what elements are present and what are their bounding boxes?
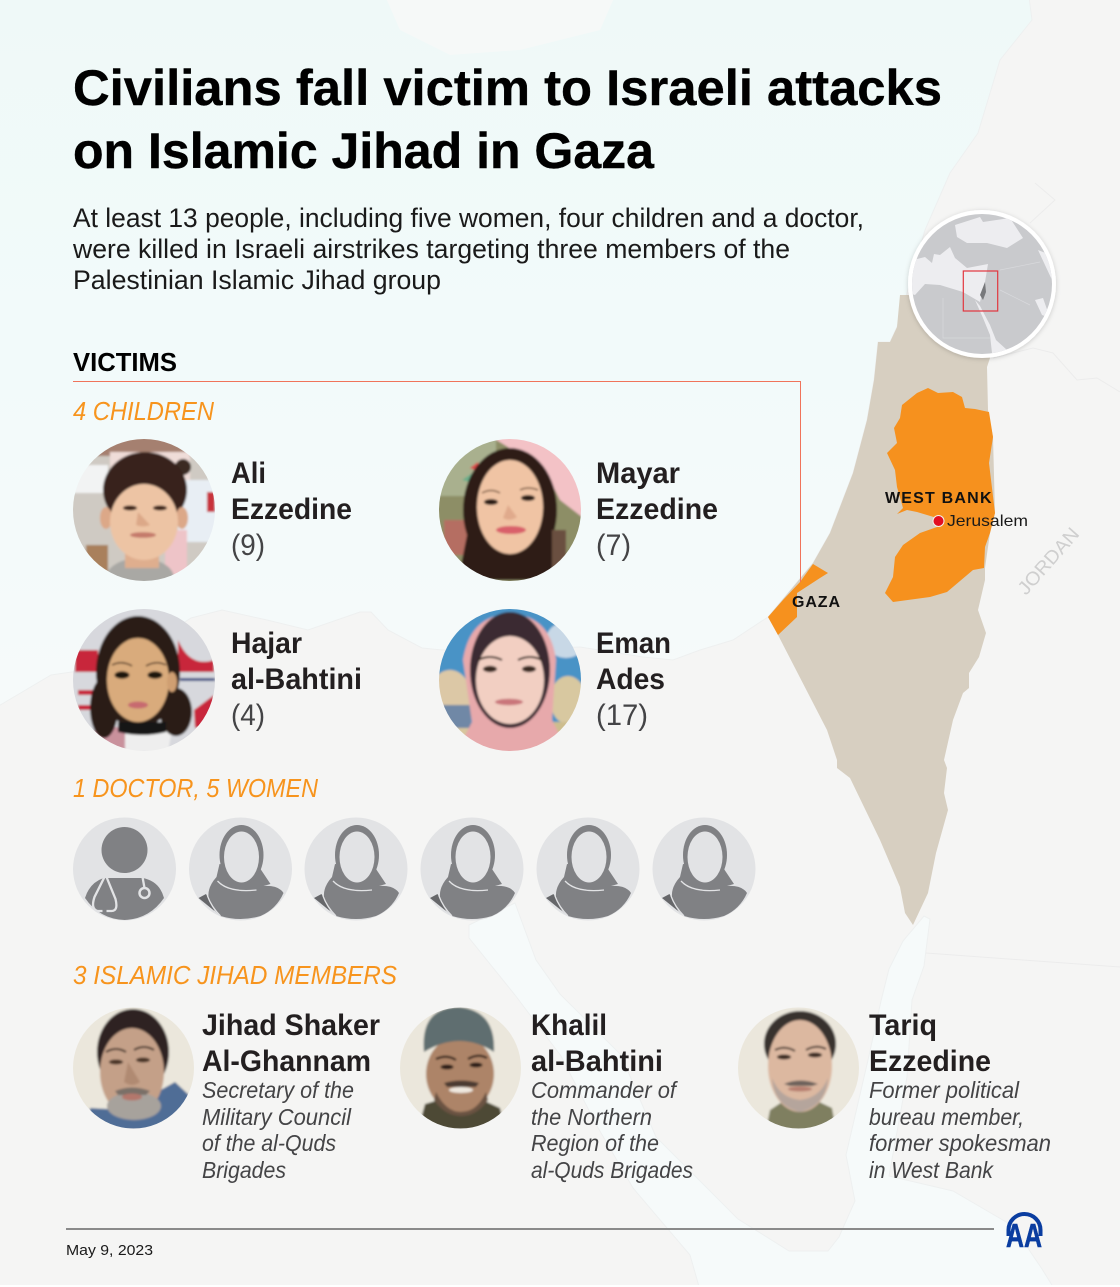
- frame line: [73, 382, 800, 582]
- role: Commander of: [531, 1077, 678, 1103]
- role: Military Council: [202, 1104, 352, 1130]
- icon: woman 4: [536, 818, 640, 920]
- west bank region: [885, 388, 995, 602]
- label: west bank: WEST BANK: [885, 490, 993, 507]
- mediterranean sea: [0, 0, 1032, 707]
- icon: woman 2: [304, 818, 408, 920]
- age: (7): [596, 529, 631, 562]
- label: gaza: GAZA: [792, 594, 842, 611]
- label: jordan: JORDAN: [1014, 524, 1084, 599]
- role: in West Bank: [869, 1157, 994, 1183]
- icon: woman 1: [189, 818, 292, 920]
- age: (9): [231, 529, 265, 562]
- subtitle: [72, 203, 864, 295]
- name: Ezzedine: [869, 1045, 991, 1078]
- portrait: Mayar: [439, 439, 581, 581]
- victim card: Mayar Ezzedine: [436, 436, 718, 586]
- heading: 1 doctor, 5 women: 1 DOCTOR, 5 WOMEN: [73, 773, 318, 803]
- footer rule: [66, 1228, 994, 1230]
- icon: woman 5: [652, 818, 756, 920]
- name: [231, 627, 362, 696]
- heading: victims: VICTIMS: [73, 347, 177, 377]
- name: al-Bahtini: [531, 1045, 663, 1078]
- name: Tariq: [869, 1009, 937, 1042]
- member card: Tariq Ezzedine: [735, 1005, 1051, 1183]
- victim card: Eman Ades: [439, 609, 670, 751]
- name: [869, 1009, 991, 1078]
- member card: Khalil al-Bahtini: [397, 1005, 693, 1183]
- title: [73, 60, 942, 179]
- name: Jihad Shaker: [202, 1009, 381, 1042]
- role: [531, 1077, 693, 1183]
- name: Hajar: [231, 627, 302, 660]
- name: al-Bahtini: [231, 663, 362, 696]
- role: [869, 1077, 1051, 1183]
- subtitle: At least 13 people, including five women, four children and a doctor,: [73, 203, 864, 233]
- role: al-Quds Brigades: [531, 1157, 693, 1183]
- name: Khalil: [531, 1009, 607, 1042]
- role: the Northern: [531, 1104, 652, 1130]
- subtitle: were killed in Israeli airstrikes targeting three members of the: [72, 234, 790, 264]
- age: (17): [596, 699, 648, 732]
- role: of the al-Quds: [202, 1130, 336, 1156]
- name: Ezzedine: [231, 493, 352, 526]
- member card: Jihad Shaker Al-Ghannam: [70, 1005, 381, 1183]
- portrait: Khalil: [400, 1008, 521, 1128]
- name: [202, 1009, 381, 1078]
- name: Ezzedine: [596, 493, 718, 526]
- date: May 9, 2023: [66, 1242, 153, 1259]
- role: former spokesman: [869, 1130, 1051, 1156]
- heading: 3 islamic jihad members: 3 ISLAMIC JIHAD MEMBERS: [73, 960, 398, 990]
- name: Mayar: [596, 457, 681, 490]
- role: Region of the: [531, 1130, 659, 1156]
- name: Ali: [231, 457, 266, 490]
- icon: doctor: [73, 818, 176, 920]
- victim card: Hajar al-Bahtini: [70, 606, 362, 756]
- icon: Anadolu Agency logo: AA: [1006, 1217, 1042, 1254]
- heading: 4 children: 4 CHILDREN: [73, 396, 214, 426]
- locator globe: [905, 210, 1058, 362]
- name: [596, 627, 671, 696]
- name: [596, 457, 718, 526]
- red sea and gulfs: [469, 903, 1055, 1287]
- icon: woman 3: [420, 818, 524, 920]
- name: Al-Ghannam: [202, 1045, 371, 1078]
- role: [202, 1077, 354, 1183]
- jerusalem marker: Jerusalem: [947, 513, 1028, 530]
- gaza region: [768, 564, 828, 635]
- israel landmass: [768, 295, 995, 925]
- portrait: Jihad: [73, 1008, 194, 1128]
- cyprus: [386, 0, 614, 55]
- role: bureau member,: [869, 1104, 1024, 1130]
- portrait: Tariq: [738, 1008, 859, 1128]
- title: Civilians fall victim to Israeli attacks: [73, 60, 942, 116]
- subtitle: Palestinian Islamic Jihad group: [73, 265, 441, 295]
- role: Secretary of the: [202, 1077, 354, 1103]
- role: Former political: [869, 1077, 1020, 1103]
- name: Ades: [596, 663, 665, 696]
- portrait: Eman: [439, 609, 581, 751]
- name: [531, 1009, 663, 1078]
- role: Brigades: [202, 1157, 286, 1183]
- age: (4): [231, 699, 265, 732]
- victim card: Ali Ezzedine: [73, 439, 351, 581]
- portrait: Hajar: [73, 609, 215, 751]
- portrait: Ali: [73, 439, 215, 581]
- name: Eman: [596, 627, 671, 660]
- name: [231, 457, 352, 526]
- title: on Islamic Jihad in Gaza: [73, 123, 655, 179]
